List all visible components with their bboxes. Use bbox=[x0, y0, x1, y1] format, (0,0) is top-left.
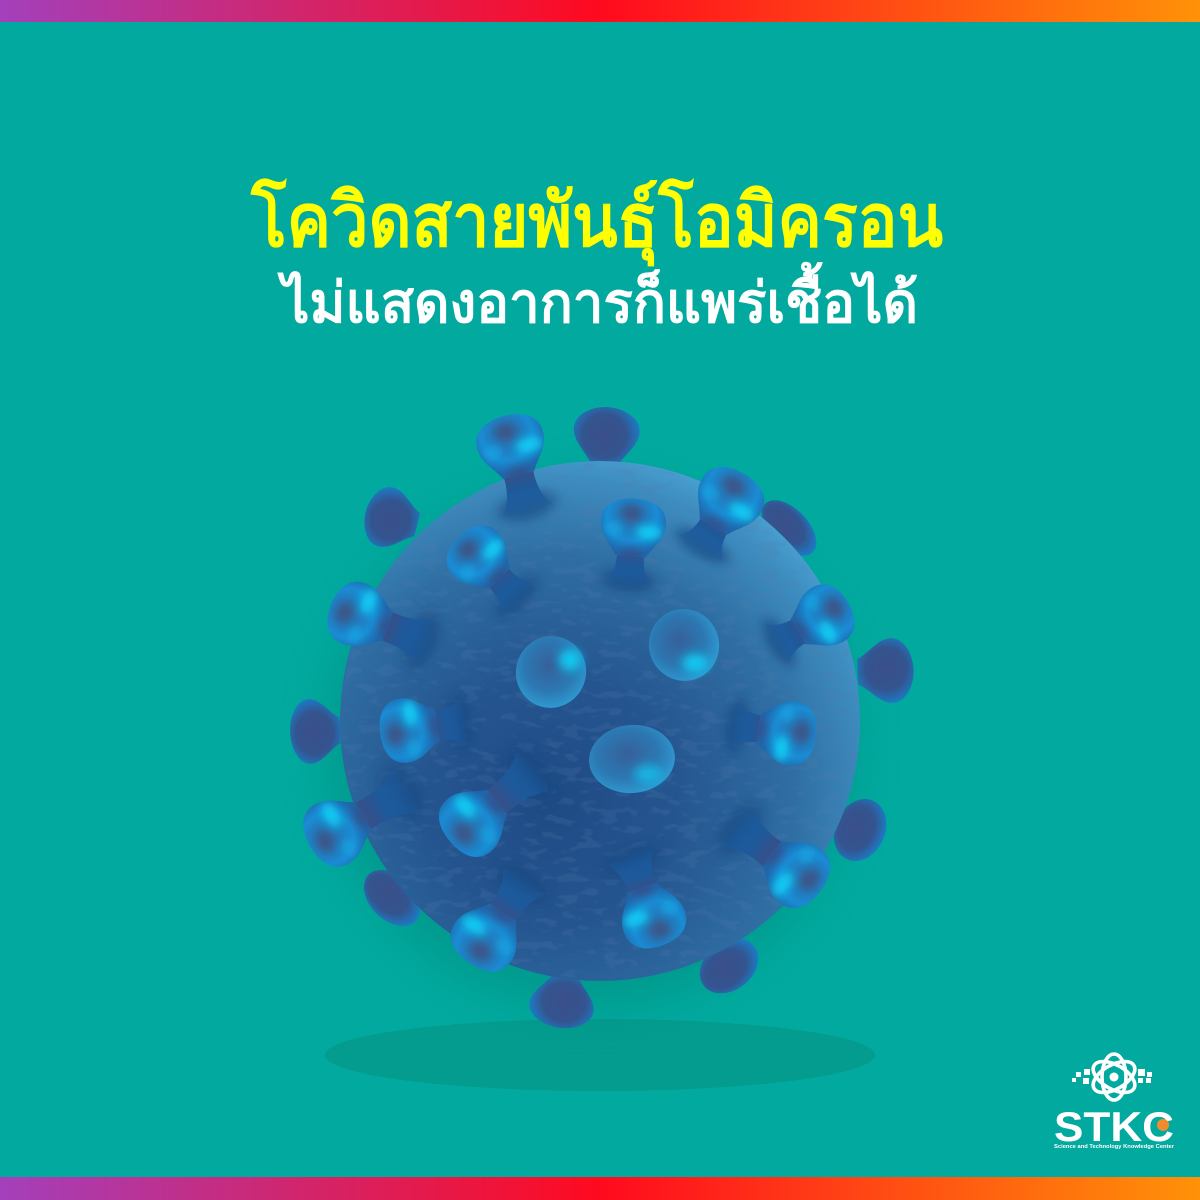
spike: bottom left bbox=[441, 854, 558, 982]
spike: right middle bbox=[720, 692, 820, 769]
spike: left middle bbox=[376, 689, 477, 766]
bottom gradient bar bbox=[0, 1177, 1200, 1200]
spike: right lower bbox=[706, 792, 841, 918]
spike: top centre bbox=[595, 496, 668, 595]
spike: upper left inner bbox=[437, 515, 548, 627]
logo pixel squares bbox=[1072, 1069, 1152, 1084]
title line 2: ไม่แสดงอาการก็แพร่เชื้อได้ bbox=[277, 262, 918, 334]
virus illustration bbox=[289, 405, 915, 1032]
spike: left lower bbox=[293, 755, 434, 876]
cap: right bbox=[639, 599, 729, 691]
spike: centre lower bbox=[428, 737, 565, 867]
spikes behind sphere bbox=[289, 405, 915, 1032]
spike: top right bbox=[667, 457, 773, 573]
spike: top left bbox=[471, 408, 563, 529]
spike: right upper bbox=[753, 576, 864, 676]
title line 1: โควิดสายพันธุ์โอมิครอน bbox=[250, 177, 943, 267]
spike: left upper bbox=[319, 575, 448, 675]
ground shadow bbox=[325, 1019, 875, 1091]
logo orange dot bbox=[1157, 1119, 1169, 1131]
sphere body bbox=[340, 461, 860, 981]
cap: centre bbox=[586, 721, 678, 797]
logo atom icon bbox=[1088, 1054, 1140, 1100]
title bbox=[250, 177, 943, 334]
cap: left bbox=[506, 626, 596, 718]
sphere texture bbox=[342, 463, 858, 979]
logo wordmark: STKC bbox=[1054, 1103, 1174, 1150]
top gradient bar bbox=[0, 0, 1200, 22]
sphere cast shadow bbox=[328, 483, 852, 1007]
logo: STKC bbox=[1054, 1054, 1175, 1150]
logo tagline: Science and Technology Knowledge Center bbox=[1054, 1144, 1175, 1150]
spike: bottom centre bbox=[597, 836, 693, 956]
